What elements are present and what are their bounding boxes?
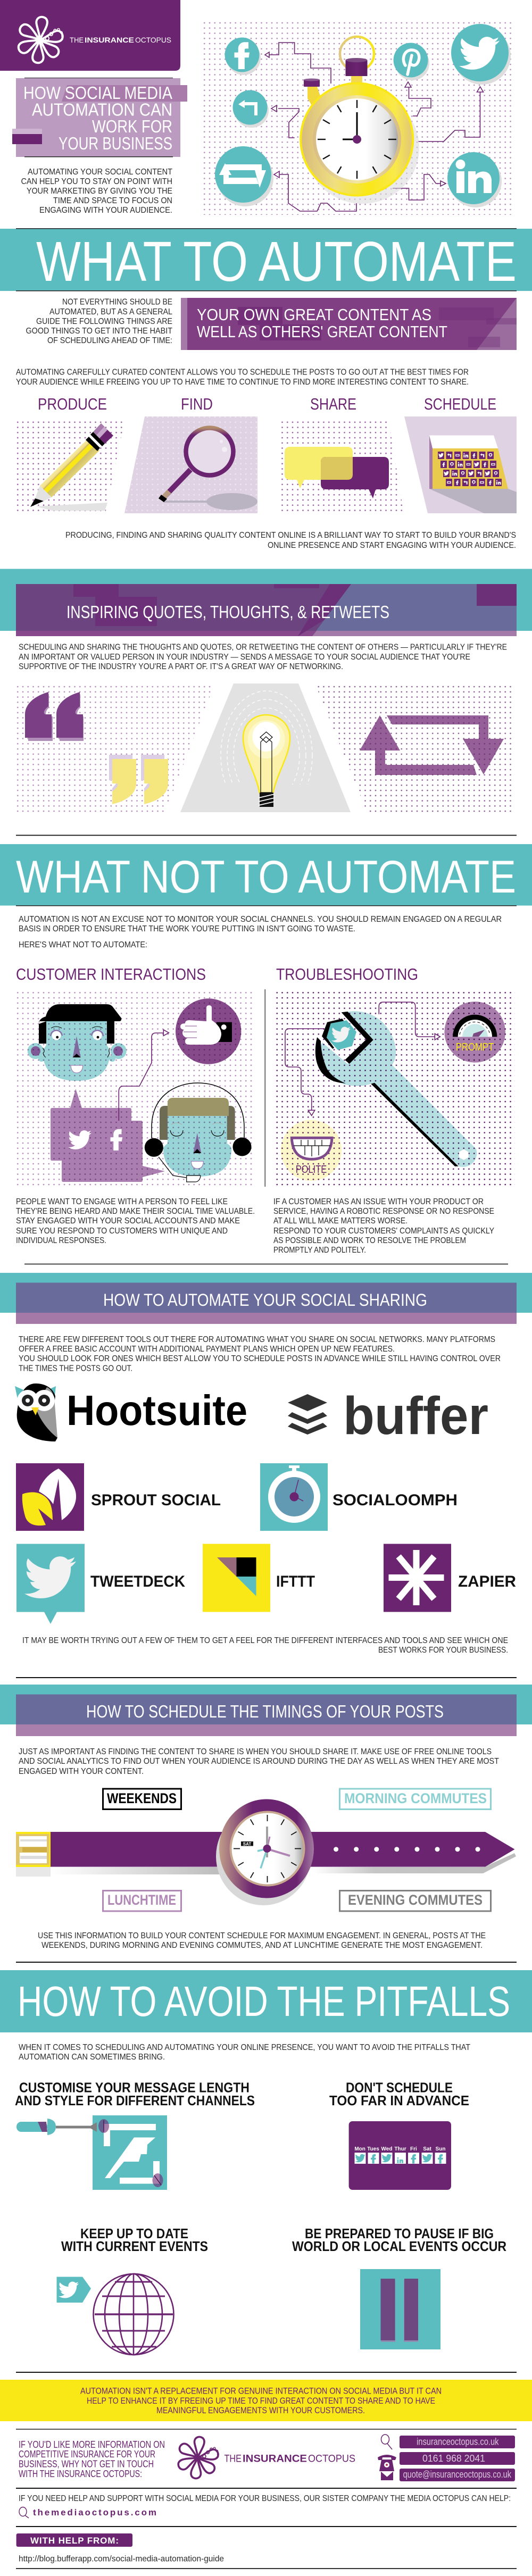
text: not everything: NOT EVERYTHING SHOULD BE — [62, 298, 172, 306]
label: morning commutes: MORNING COMMUTES — [344, 1790, 487, 1806]
panel: schedule calendar — [404, 416, 517, 513]
connector — [119, 1030, 169, 1121]
intro text: YOUR MARKETING BY GIVING YOU THE — [27, 187, 172, 196]
text: not everything: AUTOMATED, BUT AS A GENERAL — [49, 307, 172, 316]
pitfall heading: customise: AND STYLE FOR DIFFERENT CHANNELS — [15, 2093, 255, 2108]
text: troubleshooting copy: IF A CUSTOMER HAS AN ISSUE WITH YOUR PRODUCT OR — [273, 1197, 484, 1206]
owl icon — [15, 1383, 57, 1441]
text: troubleshooting copy: RESPOND TO YOUR CUSTOMERS' COMPLAINTS AS QUICKLY — [273, 1227, 494, 1236]
text: tools intro — [19, 1335, 501, 1373]
icon: search — [381, 2435, 392, 2449]
text: automation is not an excuse: BASIS IN ORDER TO ENSURE THAT THE WORK YOU'RE PUTTING IN ISN'T GOING TO WASTE. — [19, 924, 355, 933]
brand name: THE — [70, 36, 84, 44]
speech bubbles — [51, 1089, 165, 1182]
tool: socialoomph: SOCIALOOMPH — [332, 1491, 458, 1509]
day names: Mon — [354, 2146, 365, 2152]
icons in speech bubble — [68, 1129, 122, 1151]
column headings: FIND — [181, 395, 213, 413]
text: tools intro: OFFER A FREE BASIC ACCOUNT WITH ADDITIONAL PAYMENT PLANS WHICH OPEN UP NEW FEATURES. — [19, 1345, 395, 1354]
icon: pinterest — [394, 43, 429, 80]
conclusion text: AUTOMATION ISN'T A REPLACEMENT FOR GENUINE INTERACTION ON SOCIAL MEDIA BUT IT CAN — [80, 2386, 442, 2396]
contact pills: 0161 968 2041 — [422, 2453, 485, 2464]
tool: sprout social: SPROUT SOCIAL — [91, 1491, 221, 1509]
day icons — [355, 2154, 443, 2164]
conclusion text — [80, 2386, 442, 2415]
tool: ifttt — [203, 1544, 315, 1612]
wrench body — [319, 1011, 477, 1167]
callout: your own great content — [181, 298, 517, 350]
polite circle base — [281, 1120, 342, 1181]
panel: customer interactions — [16, 990, 255, 1186]
strap — [51, 1832, 515, 1867]
prompt gauge — [453, 1015, 497, 1053]
icon: phone — [378, 2455, 396, 2471]
strap shadows — [16, 1853, 516, 1877]
section band: what not to automate — [0, 835, 532, 906]
panel: retweet icon — [315, 683, 512, 812]
icon: twitter tag — [56, 2277, 91, 2303]
title text: AUTOMATION CAN — [32, 100, 172, 119]
day names: Tues — [367, 2146, 379, 2152]
conclusion text: MEANINGFUL ENGAGEMENTS WITH YOUR CUSTOMERS. — [156, 2405, 365, 2415]
icon: retweet — [215, 146, 273, 206]
day window: SAT — [243, 1841, 251, 1847]
source text: http://blog.bufferapp.com/social-media-automation-guide — [19, 2554, 224, 2564]
icon: resize message — [16, 2115, 167, 2190]
case — [216, 1807, 311, 1905]
text: worth trying — [22, 1636, 508, 1655]
dotted overlay — [274, 990, 515, 1186]
callout text — [197, 305, 447, 341]
day names: Fri — [410, 2146, 417, 2152]
contact pills — [400, 2436, 515, 2481]
face two base — [163, 1116, 231, 1177]
footer brand name: OCTOPUS — [308, 2454, 355, 2465]
text: curated content: YOUR AUDIENCE WHILE FREEING YOU UP TO HAVE TIME TO CONTINUE TO FIND MORE INTERESTING CONTENT TO SHARE. — [16, 378, 469, 387]
wristwatch — [16, 1799, 516, 1905]
connectors — [285, 1002, 440, 1115]
text: not everything: GUIDE THE FOLLOWING THINGS ARE — [36, 317, 172, 326]
panel: quotes — [16, 683, 215, 812]
intro text: TIME AND SPACE TO FOCUS ON — [53, 196, 172, 205]
text: troubleshooting copy — [273, 1197, 494, 1255]
thumbs up circle base — [176, 998, 241, 1064]
opening quote marks — [25, 692, 84, 741]
label: evening commutes: EVENING COMMUTES — [348, 1892, 483, 1908]
twitter nut — [322, 1019, 356, 1050]
day names: Sun — [436, 2146, 445, 2152]
text: automation is not an excuse: HERE'S WHAT NOT TO AUTOMATE: — [19, 940, 147, 949]
icon: pause — [360, 2269, 440, 2349]
ticks — [234, 1815, 301, 1882]
icon: globe — [94, 2274, 173, 2355]
text: use this information: WEEKENDS, DURING MORNING AND EVENING COMMUTES, AND AT LUNCHTIME GENERATE THE MOST ENGAGEMENT. — [41, 1941, 483, 1950]
footer: contact — [16, 2429, 517, 2481]
text: automation is not an excuse — [19, 915, 502, 949]
icon: search small — [19, 2507, 29, 2518]
closing quote marks — [109, 755, 168, 804]
footer brand name: THE — [225, 2454, 242, 2465]
panel: light bulb — [180, 683, 351, 820]
callout text: YOUR OWN GREAT CONTENT AS — [197, 305, 431, 324]
footer brand name — [225, 2454, 355, 2465]
text: troubleshooting copy: AS POSSIBLE AND WORK TO RESOLVE THE PROBLEM — [273, 1236, 466, 1245]
yellow bubble — [285, 447, 353, 488]
icon: linkedin — [447, 152, 502, 207]
text: scheduling thoughts: AN IMPORTANT OR VALUED PERSON IN YOUR INDUSTRY — SENDS A MESSAGE TO YOUR SOCIAL AUDIENCE THAT YOU'RE — [19, 653, 470, 662]
contact pills: insuranceoctopus.co.uk — [417, 2436, 499, 2447]
footer: media octopus — [16, 2488, 517, 2527]
header: brand panel — [0, 0, 180, 71]
text: customer interactions copy: THEY'RE BEING HEARD AND MAKE THEIR SOCIAL TIME VALUABLE. — [16, 1207, 255, 1216]
tool: tweetdeck — [16, 1544, 185, 1624]
logo: buffer: buffer — [343, 1386, 488, 1446]
text: customer interactions copy: SURE YOU RESPOND TO CUSTOMERS WITH UNIQUE AND — [16, 1227, 228, 1236]
intro text: CAN HELP YOU TO STAY ON POINT WITH — [21, 177, 172, 186]
text: not everything — [26, 298, 172, 345]
text: troubleshooting copy: AT ALL WILL MAKE MATTERS WORSE. — [273, 1216, 408, 1226]
subsection band: inspiring quotes — [0, 569, 532, 636]
day window — [241, 1841, 253, 1847]
text: customer interactions copy: PEOPLE WANT TO ENGAGE WITH A PERSON TO FEEL LIKE — [16, 1197, 228, 1206]
text: curated content — [16, 368, 469, 387]
contact prompt text: BUSINESS, WHY NOT GET IN TOUCH — [19, 2458, 154, 2469]
subheadings: CUSTOMER INTERACTIONS — [16, 965, 206, 983]
text: pitfalls intro: WHEN IT COMES TO SCHEDULING AND AUTOMATING YOUR ONLINE PRESENCE, YOU WANT TO AVOID THE PITFALLS THAT — [19, 2043, 470, 2052]
label: weekends — [103, 1789, 181, 1810]
pitfall heading: be prepared to pause: WORLD OR LOCAL EVENTS OCCUR — [292, 2238, 506, 2254]
arrowheads — [265, 52, 483, 186]
text: scheduling intro — [19, 1747, 499, 1776]
contact prompt text: COMPETITIVE INSURANCE FOR YOUR — [19, 2449, 155, 2460]
column headings: SCHEDULE — [424, 395, 496, 413]
title text: WORK FOR — [92, 116, 172, 136]
icon: weekly calendar — [349, 2121, 451, 2190]
footer: credit: WITH HELP FROM: — [30, 2536, 119, 2546]
heading: HOW TO AUTOMATE YOUR SOCIAL SHARING — [103, 1290, 427, 1310]
hair and features one — [39, 1004, 121, 1073]
text: not everything: GOOD THINGS TO GET INTO THE HABIT — [26, 327, 172, 336]
thumbs up hand — [180, 1005, 232, 1045]
hands — [257, 1827, 290, 1869]
title panel — [12, 78, 187, 157]
text: customer interactions copy: STAY ENGAGED WITH YOUR SOCIAL ACCOUNTS AND MAKE — [16, 1216, 240, 1226]
subheadings — [16, 965, 418, 983]
day names: Wed — [381, 2146, 392, 2152]
text: customer interactions copy — [16, 1197, 255, 1245]
tool: zapier — [384, 1544, 516, 1612]
panel: produce pencil — [16, 419, 125, 513]
media octopus url: themediaoctopus.com — [33, 2507, 156, 2517]
intro text: ENGAGING WITH YOUR AUDIENCE. — [39, 206, 172, 215]
brand name: OCTOPUS — [135, 36, 171, 44]
text: scheduling thoughts: SUPPORTIVE OF THE INDUSTRY YOU'RE A PART OF. IT'S A GREAT WAY OF NETWORKING. — [19, 662, 343, 671]
text: troubleshooting copy: PROMPTLY AND POLITELY. — [273, 1246, 366, 1255]
brand name — [70, 36, 171, 44]
logo: hootsuite — [15, 1383, 247, 1441]
icon: twitter — [451, 24, 511, 85]
band: how to schedule — [0, 1677, 532, 1736]
brand name: INSURANCE — [85, 36, 134, 44]
logo: hootsuite: Hootsuite — [66, 1387, 247, 1434]
text: troubleshooting copy: SERVICE, HAVING A ROBOTIC RESPONSE OR NO RESPONSE — [273, 1207, 494, 1216]
icon: footer logo — [177, 2437, 219, 2478]
mini social icons grid — [438, 452, 502, 486]
column headings: SHARE — [310, 395, 356, 413]
pitfall heading: don't schedule — [329, 2080, 469, 2108]
purple bubble — [321, 457, 389, 498]
pitfall heading: be prepared to pause — [292, 2225, 506, 2254]
callout text: WELL AS OTHERS' GREAT CONTENT — [197, 322, 447, 341]
text: use this information — [38, 1931, 486, 1950]
label: lunchtime — [103, 1890, 181, 1911]
conclusion text: HELP TO ENHANCE IT BY FREEING UP TIME TO FIND GREAT CONTENT TO SHARE AND TO HAVE — [87, 2396, 435, 2406]
icon: reply arrow — [233, 90, 269, 128]
pitfall heading: keep up to date: KEEP UP TO DATE — [80, 2225, 188, 2241]
heading: INSPIRING QUOTES, THOUGHTS, & RETWEETS — [66, 602, 389, 622]
footer: credit — [16, 2533, 517, 2569]
text: not everything: OF SCHEDULING AHEAD OF TIME: — [47, 336, 172, 345]
section band: how to avoid the pitfalls — [0, 1962, 532, 2032]
face one base — [28, 1021, 127, 1081]
icon: envelope — [381, 2471, 393, 2480]
pitfall heading: don't schedule: DON'T SCHEDULE — [346, 2080, 453, 2096]
text: scheduling intro: ENGAGED WITH YOUR CONTENT. — [19, 1767, 144, 1776]
column headings: PRODUCE — [38, 395, 107, 413]
tool: tweetdeck: TWEETDECK — [90, 1573, 185, 1590]
prompt circle base — [444, 1002, 505, 1063]
day boxes — [354, 2153, 446, 2164]
column headings — [38, 395, 496, 413]
contact prompt text — [19, 2439, 165, 2479]
buckle — [16, 1832, 51, 1867]
pitfall heading: keep up to date: WITH CURRENT EVENTS — [61, 2238, 208, 2254]
band: yellow conclusion — [0, 2372, 532, 2421]
text: pitfalls intro: AUTOMATION CAN SOMETIMES BRING. — [19, 2053, 165, 2062]
panel: share bubbles — [278, 419, 404, 513]
pitfall heading: customise: CUSTOMISE YOUR MESSAGE LENGTH — [19, 2080, 250, 2096]
text: curated content: AUTOMATING CAREFULLY CURATED CONTENT ALLOWS YOU TO SCHEDULE THE POSTS TO GO OUT AT THE BEST TIMES FOR — [16, 368, 469, 377]
tool: ifttt: IFTTT — [276, 1573, 315, 1590]
strap holes — [334, 1847, 480, 1852]
text: producing finding sharing — [65, 531, 516, 550]
contact prompt text: WITH THE INSURANCE OCTOPUS: — [19, 2469, 142, 2479]
pitfall heading: keep up to date — [61, 2225, 208, 2254]
day names: Thur — [394, 2146, 406, 2152]
wrench edges — [315, 1012, 459, 1166]
title text — [23, 83, 172, 153]
day names: Sat — [423, 2146, 431, 2152]
polite smile — [292, 1138, 332, 1176]
subheadings: TROUBLESHOOTING — [276, 965, 418, 983]
hero: stopwatch and social icons — [200, 20, 512, 215]
text: worth trying: BEST WORKS FOR YOUR BUSINESS. — [378, 1646, 508, 1655]
tool: socialoomph — [260, 1463, 458, 1531]
dotted overlay — [16, 990, 255, 1186]
stack icon — [288, 1394, 327, 1435]
day names — [354, 2146, 445, 2152]
icon: facebook — [225, 37, 261, 75]
band: how to automate your social sharing — [0, 1264, 532, 1324]
intro text: AUTOMATING YOUR SOCIAL CONTENT — [28, 168, 172, 177]
contact prompt text: IF YOU'D LIKE MORE INFORMATION ON — [19, 2439, 165, 2450]
text: use this information: USE THIS INFORMATION TO BUILD YOUR CONTENT SCHEDULE FOR MAXIMUM ENGAGEMENT. IN GENERAL, POSTS AT THE — [38, 1931, 486, 1940]
prompt gauge: PROMPT — [456, 1041, 494, 1053]
section band: what to automate — [0, 228, 532, 293]
polite smile: POLITE — [296, 1164, 327, 1176]
pitfall heading: be prepared to pause: BE PREPARED TO PAUSE IF BIG — [305, 2225, 494, 2241]
stopwatch — [300, 37, 419, 204]
label: weekends: WEEKENDS — [107, 1790, 177, 1806]
text: customer interactions copy: INDIVIDUAL RESPONSES. — [16, 1236, 106, 1245]
icon: octopus logo — [16, 17, 64, 63]
label: lunchtime: LUNCHTIME — [107, 1892, 176, 1908]
pitfall heading: customise — [15, 2080, 255, 2108]
pitfall heading: don't schedule: TOO FAR IN ADVANCE — [329, 2093, 469, 2108]
panel: find magnifier — [124, 416, 257, 513]
title text: HOW SOCIAL MEDIA — [23, 83, 172, 103]
intro text — [21, 168, 172, 215]
text: scheduling thoughts — [19, 643, 507, 671]
text: pitfalls intro — [19, 2043, 470, 2062]
panel: troubleshooting — [274, 990, 515, 1186]
tool: sprout social — [16, 1463, 221, 1531]
tool: zapier: ZAPIER — [458, 1573, 516, 1590]
title text: YOUR BUSINESS — [59, 134, 172, 153]
text: tools intro: THE TIMES THE POSTS GO OUT. — [19, 1364, 132, 1373]
heading: HOW TO SCHEDULE THE TIMINGS OF YOUR POSTS — [86, 1702, 444, 1721]
footer brand name: INSURANCE — [243, 2454, 307, 2465]
connectors — [268, 43, 480, 211]
hair and features two — [145, 1083, 251, 1182]
